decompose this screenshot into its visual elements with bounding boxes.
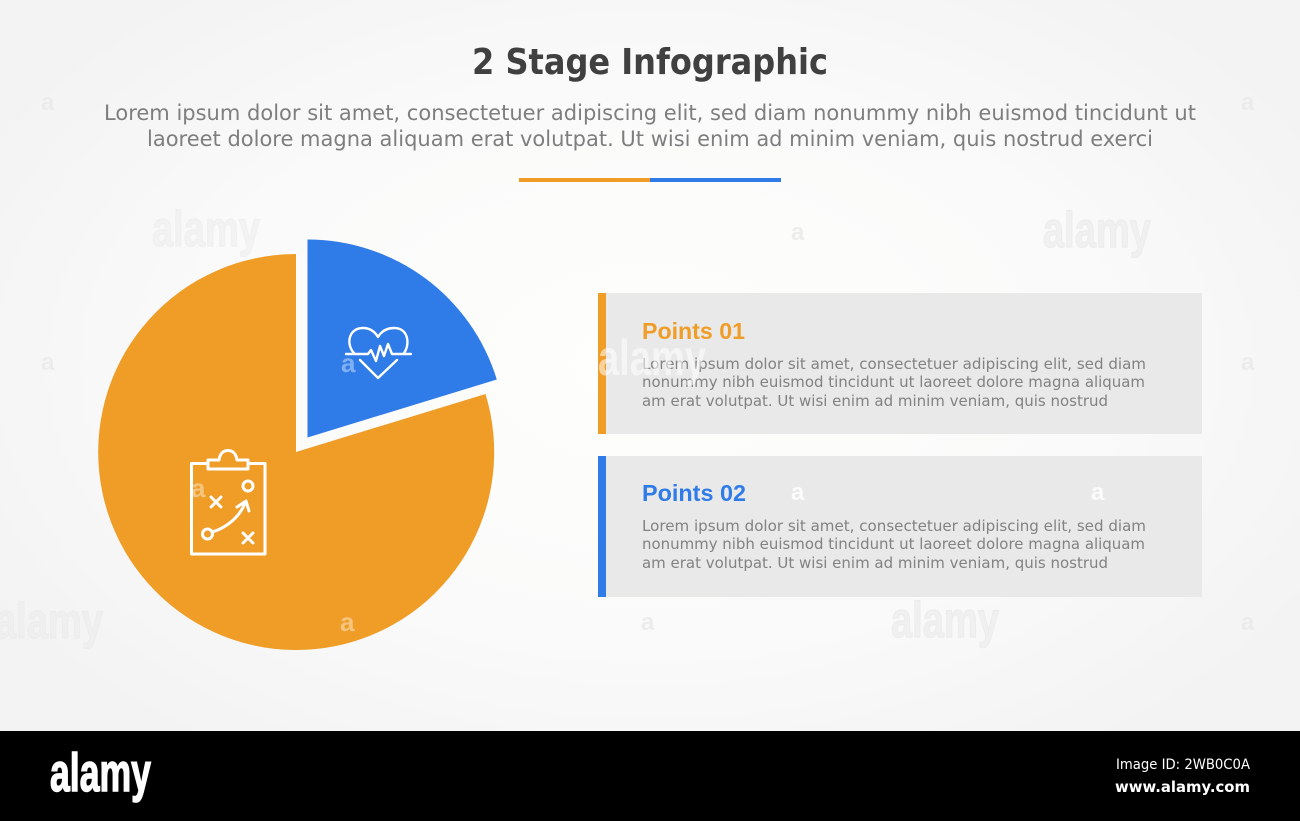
- panel: points 01: [598, 293, 1202, 434]
- panel: points 02: [598, 456, 1202, 597]
- watermarks: [0, 89, 1255, 649]
- footer bar: [0, 731, 1300, 821]
- watermarks: alamy: [152, 201, 260, 257]
- watermarks: a: [41, 89, 55, 116]
- text block: points 02: am erat volutpat. Ut wisi enim ad minim veniam, quis nostrud: [642, 554, 1108, 572]
- watermarks: a: [791, 219, 805, 246]
- icon: clipboard strategy: [192, 450, 265, 554]
- icon: heart with pulse: [346, 328, 411, 378]
- watermarks: a: [791, 479, 805, 506]
- text block: points 01: am erat volutpat. Ut wisi enim ad minim veniam, quis nostrud: [642, 392, 1108, 410]
- text block: points 01: nonummy nibh euismod tincidunt ut laoreet dolore magna aliquam: [642, 373, 1145, 391]
- footer logo: alamy: [50, 743, 151, 803]
- watermarks: a: [1241, 89, 1255, 116]
- watermarks: alamy: [1043, 202, 1151, 258]
- heading: points 01: Points 01: [642, 318, 745, 344]
- watermarks: a: [1241, 609, 1255, 636]
- heading: points 02: Points 02: [642, 480, 746, 506]
- pie slice: blue small: [308, 240, 497, 438]
- watermarks: a: [341, 348, 356, 378]
- website: www.alamy.com: [1115, 778, 1250, 796]
- watermarks: alamy: [598, 330, 706, 386]
- watermarks: a: [191, 473, 206, 503]
- watermarks: a: [1241, 349, 1255, 376]
- title: 2 Stage Infographic: [472, 42, 828, 83]
- watermarks: a: [641, 609, 655, 636]
- intro text block: laoreet dolore magna aliquam erat volutpat. Ut wisi enim ad minim veniam, quis nostrud exerci: [147, 127, 1153, 152]
- image id: Image ID: 2WB0C0A: [1116, 757, 1250, 773]
- text block: points 02: [642, 517, 1146, 572]
- accent bar: blue: [598, 456, 606, 597]
- pie chart: [98, 240, 497, 650]
- watermarks: a: [340, 607, 355, 637]
- text block: points 02: Lorem ipsum dolor sit amet, consectetuer adipiscing elit, sed diam: [642, 517, 1146, 535]
- text block: points 01: [642, 355, 1146, 410]
- accent bar: orange: [598, 293, 606, 434]
- title underline: [519, 178, 781, 182]
- intro text block: [104, 101, 1196, 152]
- text block: points 01: Lorem ipsum dolor sit amet, consectetuer adipiscing elit, sed diam: [642, 355, 1146, 373]
- pie slice: orange large: [98, 254, 494, 650]
- watermarks: alamy: [891, 592, 999, 648]
- intro text block: Lorem ipsum dolor sit amet, consectetuer adipiscing elit, sed diam nonummy nibh euismod tincidunt ut: [104, 101, 1196, 126]
- text block: points 02: nonummy nibh euismod tincidunt ut laoreet dolore magna aliquam: [642, 535, 1145, 553]
- watermarks: a: [1091, 479, 1105, 506]
- watermarks: a: [41, 349, 55, 376]
